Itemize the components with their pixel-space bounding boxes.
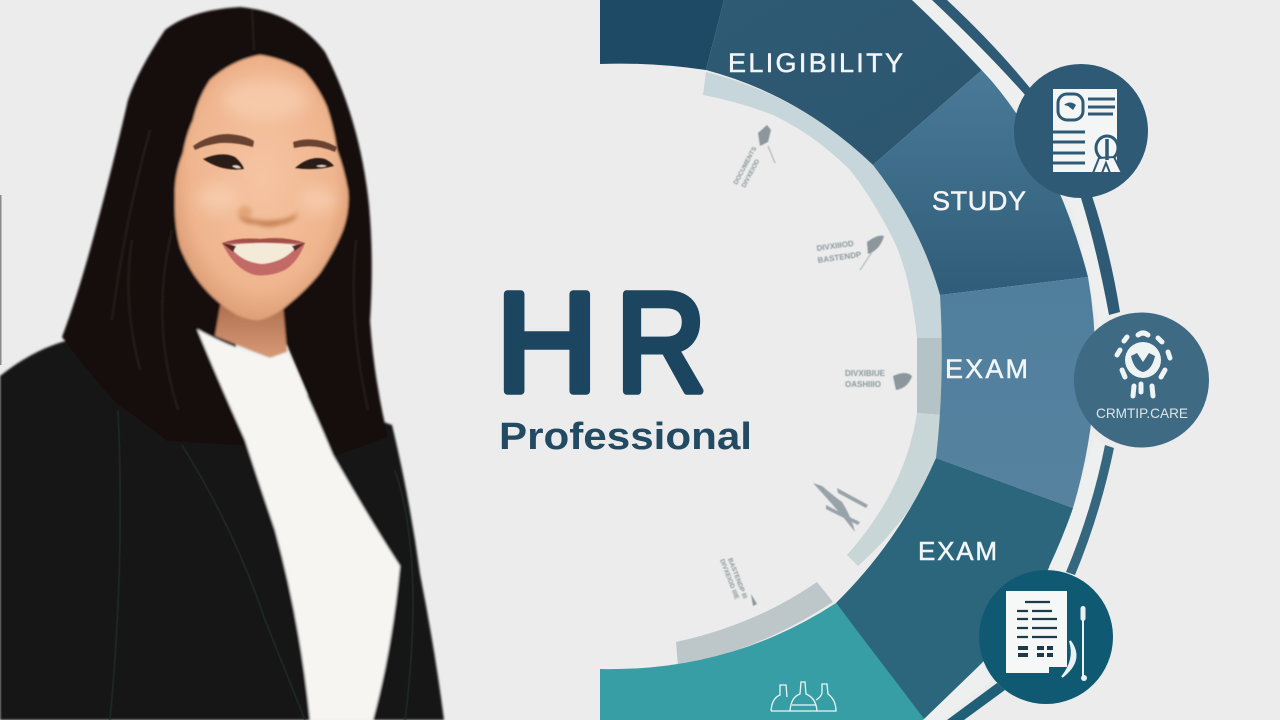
portrait: smiling woman in black blazer [0, 7, 444, 720]
outer band: top [912, 0, 1030, 108]
hair highlights [112, 10, 368, 410]
segment: teal [600, 603, 925, 720]
icon circle: exam paper and pen [979, 570, 1113, 704]
blazer [0, 330, 444, 720]
small faded icon: fifth: BASTENDP III [726, 557, 748, 600]
segment: exam lower [836, 458, 1073, 720]
segment: study: STUDY [932, 186, 1026, 216]
icon circle: emblem with caption [1074, 312, 1209, 448]
outer band: middle [1068, 196, 1120, 325]
small faded icon: second [816, 236, 884, 270]
teeth [229, 243, 298, 264]
process wheel [600, 0, 1095, 720]
eyes [203, 154, 244, 170]
blazer lapels [110, 410, 413, 720]
eye whites [232, 165, 327, 168]
inner ring: lower band [847, 413, 942, 566]
small faded icon: fourth [813, 483, 868, 532]
outer band: bottom [923, 663, 1005, 720]
small faded icon: fifth: DIVXEIOD IIIE [718, 558, 740, 601]
small faded icon: third: DIVXIBIUE [845, 369, 886, 378]
outer band: lower [1049, 437, 1114, 575]
icon circle: emblem with caption: CRMTIP.CARE [1096, 405, 1188, 421]
subtitle: Professional: Professional [499, 416, 752, 458]
inner ring: upper band [703, 72, 943, 338]
title: HR: H [496, 263, 598, 421]
small faded icon: second: BASTENDP [817, 250, 863, 265]
segment: exam lower: EXAM [918, 536, 997, 566]
inner ring: bottom band [676, 582, 833, 666]
segment: eligibility: ELIGIBILITY [728, 48, 903, 78]
inner ring: middle grey block [917, 338, 943, 415]
title: HR: R [616, 263, 706, 421]
cheek glow [198, 80, 336, 213]
small faded icon: upper: DOCUMENTS [733, 145, 759, 186]
small faded icon: upper [733, 125, 775, 189]
white blouse [197, 329, 400, 720]
nose shadow [238, 206, 298, 226]
icon circle: certificate document [1014, 64, 1148, 198]
segment: study [873, 70, 1088, 295]
small faded icon: second: DIVXIIIOD [816, 239, 854, 253]
mouth [222, 238, 305, 275]
segment: exam [936, 277, 1095, 508]
small faded icon: upper: DIVXEIOD [741, 158, 761, 189]
small faded icon: fifth [718, 557, 757, 606]
neck [215, 295, 287, 358]
icon: three bells [771, 682, 836, 711]
face [175, 55, 348, 320]
eyebrows [193, 134, 254, 150]
segment: exam: EXAM [945, 354, 1028, 384]
left edge mark [0, 195, 2, 365]
small faded icon: third [845, 369, 912, 390]
top dark block [600, 0, 724, 70]
small faded icon: third: OASHIIIO [845, 380, 881, 389]
segment: eligibility [706, 0, 982, 165]
hair [62, 7, 388, 457]
